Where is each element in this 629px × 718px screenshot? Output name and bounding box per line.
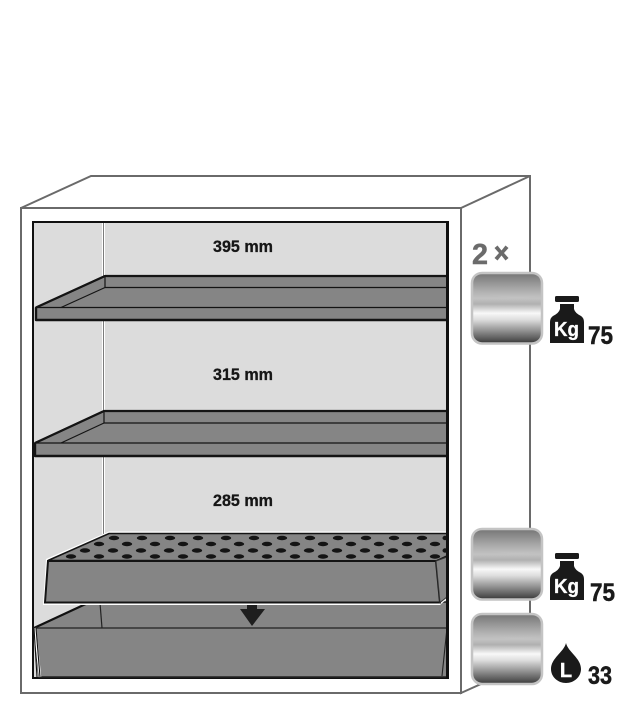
quantity label: 2×: 2 bbox=[472, 239, 488, 271]
load value: 75 lower: 75 bbox=[590, 579, 615, 607]
tray holes bbox=[66, 536, 448, 559]
cabinet interior bbox=[33, 222, 448, 678]
top shelf bbox=[36, 276, 447, 320]
weight icon: 75 kg, lower bbox=[550, 553, 584, 600]
perforated tray insert bbox=[43, 532, 448, 605]
droplet icon: litres bbox=[551, 643, 581, 683]
weight icon: 75 kg, upper bbox=[550, 296, 584, 343]
cabinet body outline bbox=[21, 176, 530, 693]
sump tile: bottom bbox=[472, 614, 542, 684]
droplet icon: litres: L bbox=[560, 660, 572, 682]
height label: 285 mm: 285 mm bbox=[213, 491, 273, 510]
height label: 395 mm: 395 mm bbox=[213, 237, 273, 256]
weight icon: 75 kg, upper: Kg bbox=[554, 319, 579, 341]
height label: 315 mm: 315 mm bbox=[213, 365, 273, 384]
bottom sump bbox=[34, 602, 447, 677]
shelf load tile: top bbox=[472, 273, 542, 344]
weight icon: 75 kg, lower: Kg bbox=[554, 576, 579, 598]
shelf load tile: middle bbox=[472, 529, 542, 600]
middle shelf bbox=[35, 411, 447, 456]
capacity value: 33: 33 bbox=[588, 662, 612, 690]
down arrow bbox=[240, 603, 265, 626]
load value: 75 upper: 75 bbox=[588, 322, 613, 350]
quantity label: 2× bbox=[472, 239, 508, 271]
